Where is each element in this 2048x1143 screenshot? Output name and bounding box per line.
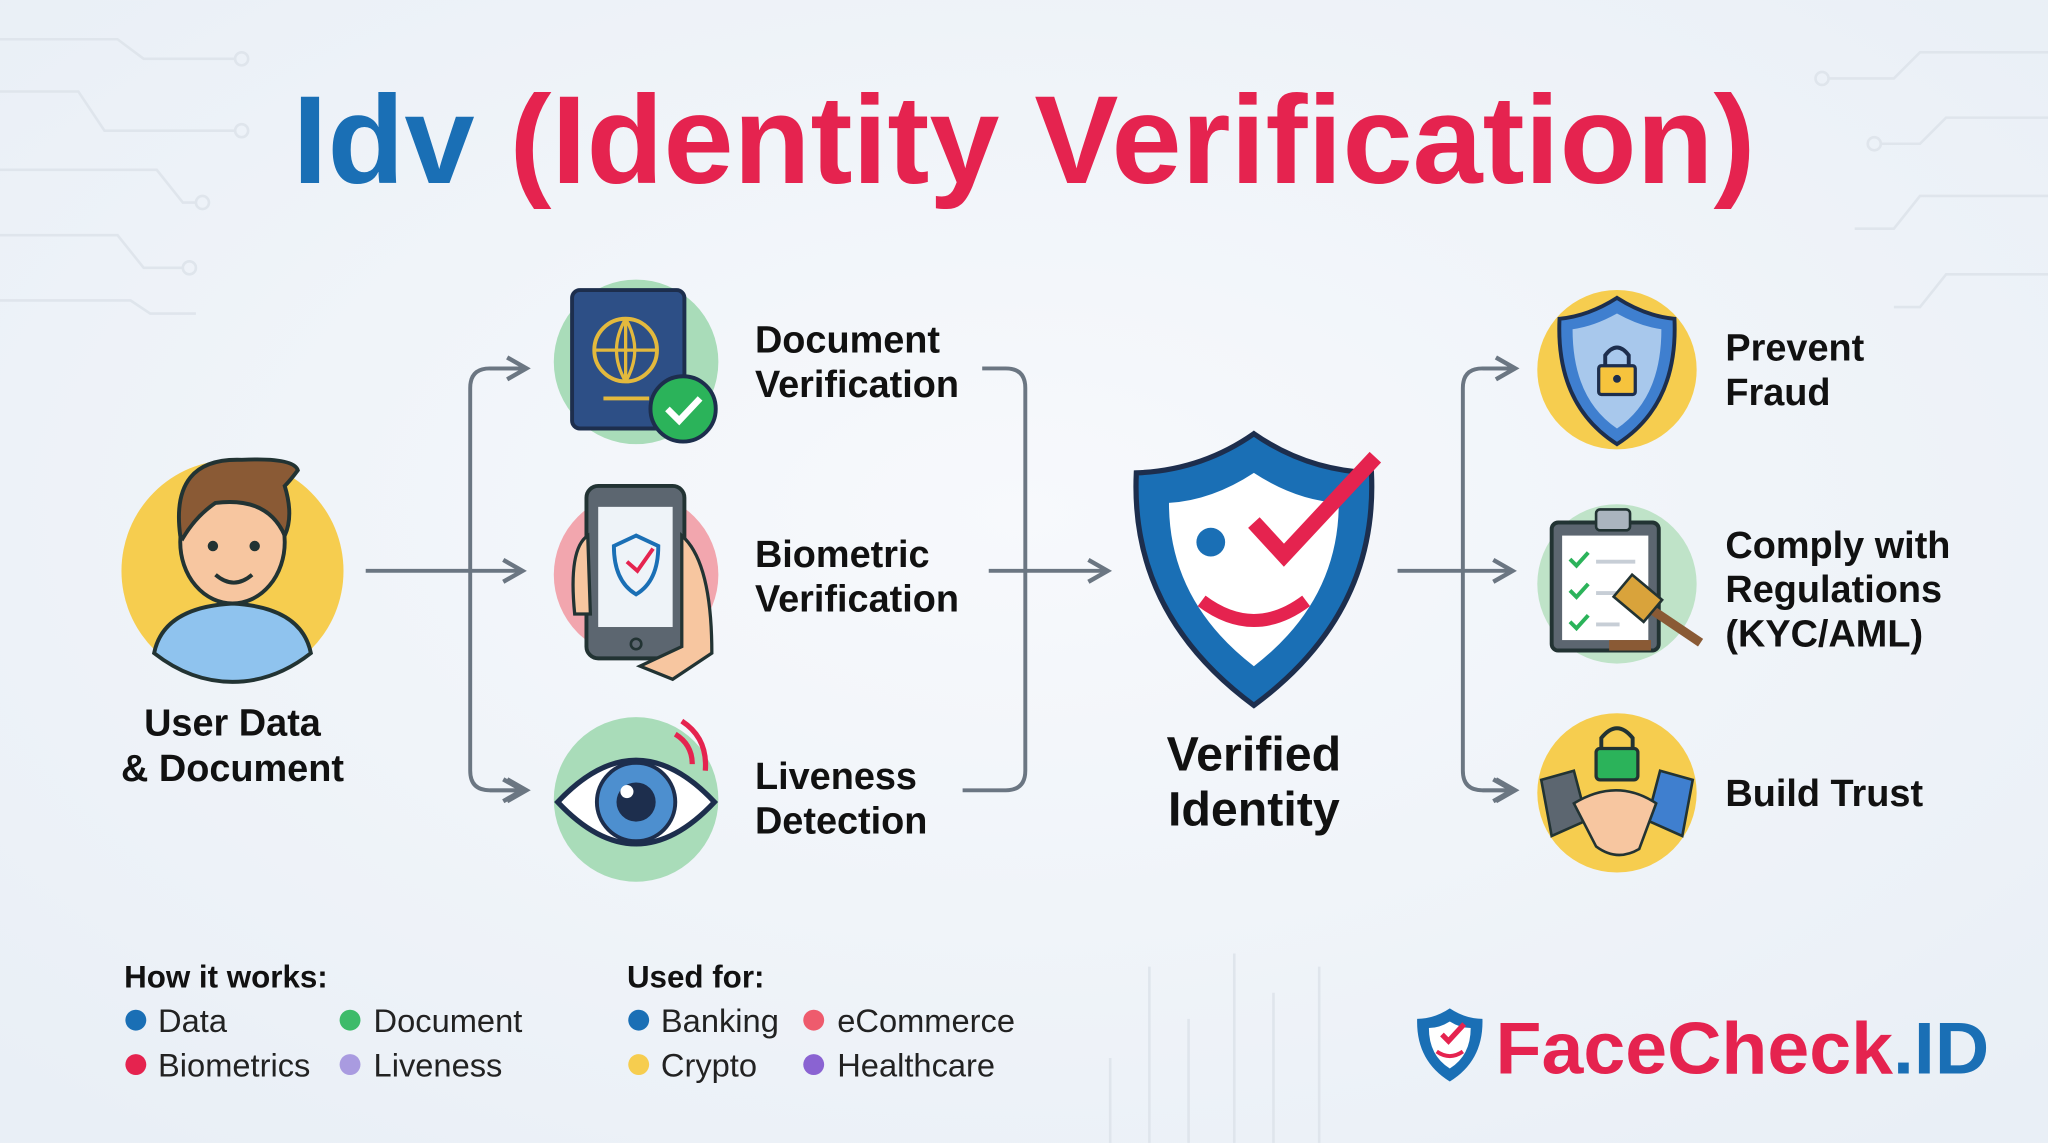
icon: prevent fraud [1537,290,1697,449]
icon: comply regulations [1537,504,1701,664]
legend: used for: Healthcare [837,1046,995,1083]
label: user data: & Document [121,748,344,790]
label: liveness detection: Liveness [755,756,917,798]
legend: used for: Banking [661,1002,779,1039]
legend: how it works: Biometrics [158,1046,310,1083]
label: comply: Regulations [1725,569,1942,611]
label: build trust: Build Trust [1725,773,1923,815]
label: prevent fraud: Prevent [1725,328,1864,370]
label: verified identity: Verified [1167,728,1341,782]
legend: used for: Crypto [661,1046,757,1083]
icon: verified shield [1136,434,1375,705]
legend: used for: eCommerce [837,1002,1015,1039]
label: comply: Comply with [1725,525,1950,567]
arrows: input branches [366,368,526,790]
icon: user [121,459,344,682]
legend: how it works: Liveness [374,1046,502,1083]
label: user data: User Data [144,702,321,744]
label: document verification: Verification [755,364,959,406]
arrows: outcomes [1398,368,1515,790]
label: prevent fraud: Fraud [1725,372,1831,414]
icon: passport [554,280,718,444]
title: Idv (Identity Verification) [293,69,1755,210]
logo: facecheck.id: FaceCheck.ID [1496,1009,1989,1090]
legend: how it works: Document [374,1002,522,1039]
legend: used for: Used for: [627,959,764,994]
arrows: merge [963,368,1108,790]
icon: build trust [1537,713,1697,873]
label: biometric verification: Verification [755,578,959,620]
legend: how it works: Data [158,1002,228,1039]
icon: phone [554,486,718,679]
label: biometric verification: Biometric [755,534,930,576]
legend: how it works [124,959,522,1083]
label: verified identity: Identity [1168,783,1340,837]
legend: how it works: How it works: [124,959,328,994]
label: document verification: Document [755,320,940,362]
icon: eye [554,717,718,882]
legend: used for [627,959,1015,1083]
label: liveness detection: Detection [755,800,927,842]
label: comply: (KYC/AML) [1725,614,1923,656]
